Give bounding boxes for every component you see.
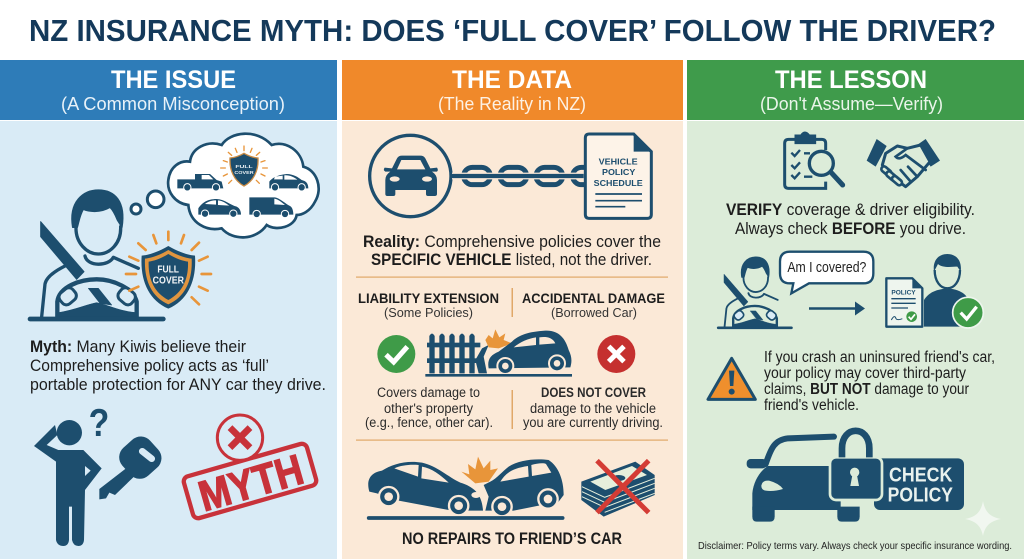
icon: handshake (867, 139, 940, 187)
text: liability extension: LIABILITY EXTENSION (358, 290, 499, 306)
icon: full cover shield: COVER (153, 275, 184, 286)
text: covers damage: other's property (384, 401, 473, 416)
heading: the lesson: (Don't Assume—Verify) (760, 94, 943, 114)
icon: policy schedule document: VEHICLE (599, 156, 638, 166)
panel: the issue (0, 60, 337, 559)
text: reality line 2: SPECIFIC VEHICLE listed, not the driver. (371, 251, 652, 269)
icon: car in circle (370, 135, 451, 217)
text: warning: your policy may cover third-party (764, 365, 966, 382)
text: no repairs: NO REPAIRS TO FRIEND’S CAR (402, 530, 622, 548)
panel: the data (342, 60, 683, 559)
icon: full cover shield: FULL (157, 265, 179, 276)
icon: thought bubble with cars (131, 134, 319, 237)
icon: thought bubble with cars: FULL (235, 164, 253, 170)
text: covers damage: Covers damage to (377, 385, 480, 400)
icon: thought bubble with cars: COVER (234, 170, 254, 176)
icon: car with padlock and check policy (747, 431, 964, 522)
heading: the data: THE DATA (452, 66, 572, 94)
text: myth line 2: Comprehensive policy acts as ‘full’ (30, 357, 269, 375)
text: liability extension (358, 290, 499, 320)
icon: car with padlock and check policy: POLICY (888, 485, 953, 507)
icon: two cars crashing (368, 457, 564, 518)
heading: the data: (The Reality in NZ) (438, 94, 586, 114)
text: always check: Always check BEFORE you drive. (735, 220, 966, 238)
icon: clipboard with magnifier (785, 133, 843, 188)
icon: red cross (597, 335, 635, 373)
text: myth: Myth: Many Kiwis believe their (30, 338, 246, 356)
text: does not cover: damage to the vehicle (530, 401, 656, 416)
text: warning: claims, BUT NOT damage to your (764, 381, 969, 398)
icon: chain (452, 167, 596, 185)
text: does not cover: you are currently driving. (523, 415, 663, 430)
icon: car hitting fence (425, 329, 572, 375)
text: warning: friend's vehicle. (764, 397, 859, 414)
icon: policy schedule document: POLICY (602, 167, 636, 177)
callout: am I covered (780, 252, 873, 293)
icon: crossed-out money (581, 461, 655, 517)
icon: sparkle (965, 501, 1001, 536)
icon: driver with seatbelt (30, 190, 163, 319)
text: covers damage (365, 385, 493, 430)
heading: the issue: (A Common Misconception) (61, 94, 285, 114)
text: covers damage: (e.g., fence, other car). (365, 415, 493, 430)
heading: the lesson (687, 60, 1024, 120)
icon: confused person: ? (89, 401, 109, 445)
text: liability extension: (Some Policies) (384, 305, 473, 320)
icon: warning triangle (708, 358, 755, 399)
text: warning: If you crash an uninsured friend's car, (764, 349, 995, 366)
icon: policy schedule document: SCHEDULE (594, 178, 643, 188)
panel: the lesson (687, 60, 1024, 559)
heading: the data (342, 60, 683, 120)
text: accidental damage: (Borrowed Car) (551, 305, 637, 320)
text: myth line 3: portable protection for ANY car they drive. (30, 376, 326, 394)
text: accidental damage: ACCIDENTAL DAMAGE (522, 290, 665, 306)
text: does not cover: DOES NOT COVER (541, 385, 646, 400)
icon: full cover shield (126, 232, 211, 309)
text: reality: Reality: Comprehensive policies cover the (363, 233, 661, 251)
text: warning (764, 349, 995, 414)
title: NZ INSURANCE MYTH: DOES ‘FULL COVER’ FOLLOW THE DRIVER? (29, 13, 996, 48)
icon: person with policy: POLICY (891, 289, 916, 296)
icon: myth stamp: MYTH (193, 446, 309, 521)
icon: car key (99, 431, 167, 499)
icon: policy schedule document (585, 134, 651, 218)
text: verify: VERIFY coverage & driver eligibility. (726, 201, 975, 219)
icon: myth stamp (183, 415, 319, 524)
icon: car with padlock and check policy: CHECK (889, 465, 953, 487)
callout: am I covered: Am I covered? (787, 260, 866, 276)
icon: small driver (718, 257, 791, 328)
arrow (809, 302, 865, 316)
text: does not cover (523, 385, 663, 430)
heading: the lesson: THE LESSON (775, 66, 927, 94)
icon: person with policy (886, 254, 983, 328)
text: accidental damage (522, 290, 665, 320)
icon: confused person (34, 401, 109, 546)
icon: green check (377, 335, 415, 373)
heading: the issue: THE ISSUE (111, 66, 236, 94)
heading: the issue (0, 60, 337, 120)
